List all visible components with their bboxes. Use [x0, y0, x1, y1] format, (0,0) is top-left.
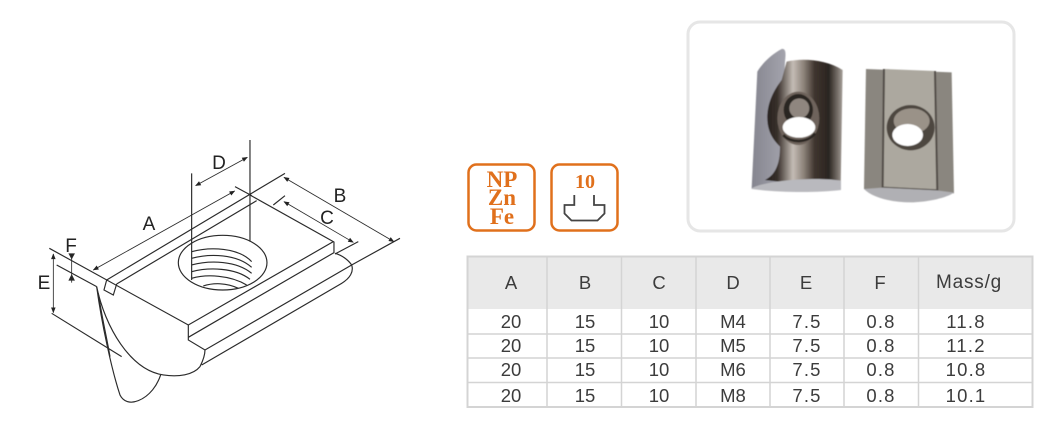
- table row: M5: M5: [720, 335, 746, 356]
- table row: M5: 10: [649, 335, 669, 356]
- table header row: [468, 257, 1032, 309]
- slot size badge: 10: [552, 164, 618, 230]
- table row: M8: 20: [501, 385, 521, 406]
- icon: T-slot profile: [564, 195, 604, 220]
- table row: M5: 15: [575, 335, 595, 356]
- table row: M8: M8: [720, 385, 746, 406]
- table row: M4: 7.5: [792, 311, 822, 332]
- finish badge: NP Zn Fe: [468, 164, 534, 230]
- table row: M8: 10.1: [946, 385, 986, 406]
- product photo panel: [688, 22, 1014, 231]
- table row: M4: [501, 311, 986, 332]
- table row: M6: 10.8: [946, 359, 986, 380]
- table row: M5: 0.8: [866, 335, 896, 356]
- table grid: [468, 256, 1032, 407]
- dimension labels: F: [65, 236, 77, 257]
- dimension lines: [53, 140, 394, 313]
- table header row: F: [874, 272, 886, 293]
- finish badge: NP Zn Fe: Zn: [488, 185, 516, 210]
- photo: round side of nut: [752, 49, 843, 192]
- table header row: A: [505, 272, 518, 293]
- table row: M4: 15: [575, 311, 595, 332]
- table row: M8: 10: [649, 385, 669, 406]
- dimension labels: D: [212, 153, 226, 174]
- dimension labels: [38, 153, 346, 294]
- table row: M6: M6: [720, 359, 746, 380]
- table row: M6: 20: [501, 359, 521, 380]
- table row: M5: 11.2: [946, 335, 986, 356]
- table row: M4: 0.8: [866, 311, 896, 332]
- table row: M6: 15: [575, 359, 595, 380]
- nut outline: [49, 173, 400, 402]
- dimension labels: A: [143, 214, 156, 235]
- finish badge: NP Zn Fe: NP: [487, 167, 517, 192]
- table row: M4: 11.8: [946, 311, 986, 332]
- table row: M4: 10: [649, 311, 669, 332]
- dimension labels: B: [334, 186, 346, 207]
- table row: M4: 20: [501, 311, 521, 332]
- table row: M6: 7.5: [792, 359, 822, 380]
- table row: M8: 7.5: [792, 385, 822, 406]
- table row: M5: 20: [501, 335, 521, 356]
- table row: M4: M4: [720, 311, 746, 332]
- table row: M5: [501, 335, 986, 356]
- table row: M5: 7.5: [792, 335, 822, 356]
- table header row: E: [800, 272, 812, 293]
- table row: M8: 0.8: [866, 385, 896, 406]
- table row: M6: [501, 359, 986, 380]
- table header row: Mass/g: [936, 272, 1002, 293]
- table header row: B: [579, 272, 591, 293]
- table header row: D: [726, 272, 740, 293]
- threaded hole: [178, 235, 267, 290]
- table row: M8: 15: [575, 385, 595, 406]
- technical drawing of T-nut: [49, 140, 400, 402]
- dimension labels: E: [38, 273, 50, 294]
- slot size badge: 10: 10: [575, 171, 595, 193]
- specification table: [468, 256, 1032, 407]
- table row: M6: 0.8: [866, 359, 896, 380]
- finish badge: NP Zn Fe: Fe: [490, 204, 514, 229]
- table row: M8: [501, 385, 986, 406]
- table row: M6: 10: [649, 359, 669, 380]
- flat side of nut: [864, 69, 954, 202]
- table header row: C: [652, 272, 666, 293]
- dimension labels: C: [320, 208, 334, 229]
